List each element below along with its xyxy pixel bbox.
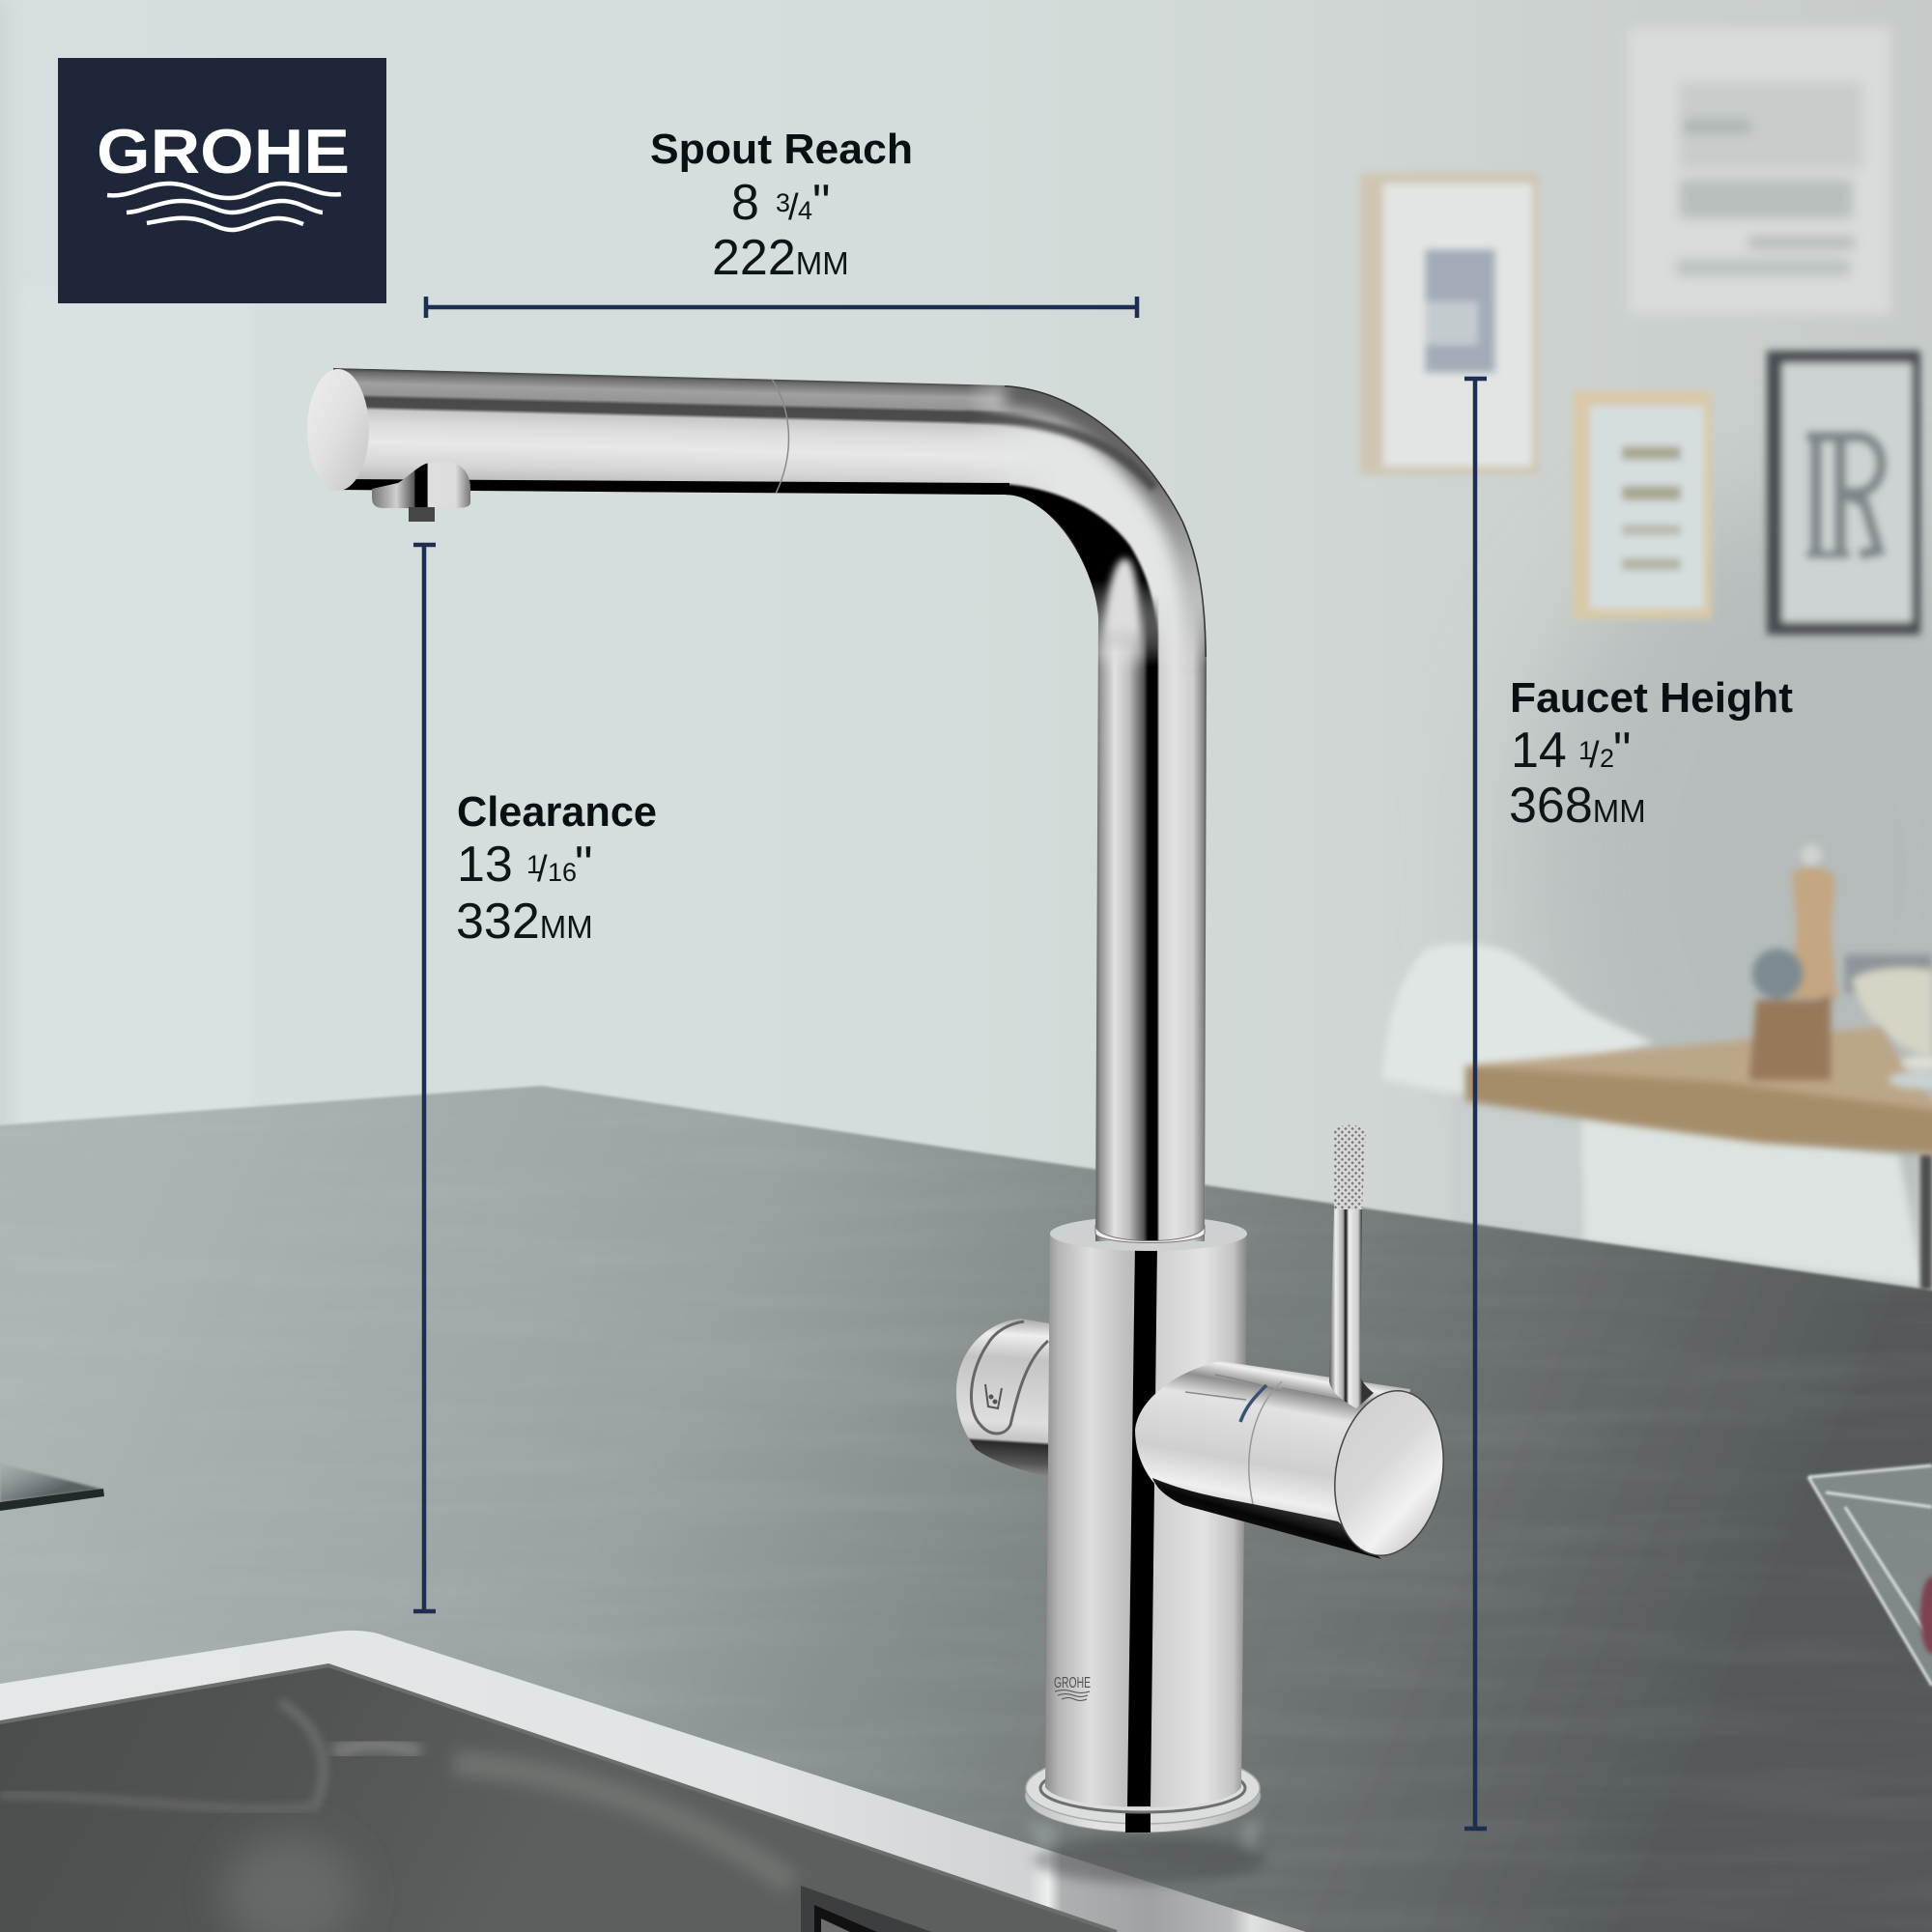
spout reach millimetres: MM: [796, 245, 849, 281]
lever knurled tip: [1334, 1125, 1366, 1209]
logo waves: [107, 184, 341, 230]
faucet: [290, 357, 1456, 1884]
faucet height heading: Faucet Height: [1510, 674, 1793, 722]
logo panel: [58, 58, 386, 303]
faucet height inches: 14: [1511, 723, 1567, 779]
clearance inches: 1: [526, 850, 541, 879]
base ring: [1025, 1752, 1261, 1833]
frame: white print, top right: [1629, 28, 1890, 314]
frame: black: [1767, 351, 1920, 635]
sink rim: [0, 1631, 1306, 1932]
spout: [333, 368, 1207, 1241]
blurred picture frames: [1360, 28, 1920, 635]
sink: [0, 1631, 1306, 1932]
blue temperature mark: [1240, 1385, 1266, 1422]
glass bowl: [1808, 1465, 1932, 1686]
sink drain: [801, 1886, 932, 1932]
faucet column: [1045, 1216, 1247, 1807]
spout reach dimension line: [426, 297, 1137, 318]
spout reach heading: Spout Reach: [650, 126, 913, 173]
handle underside shadow: [1152, 1478, 1381, 1559]
nozzle: [409, 507, 435, 522]
handle seam: [1249, 1381, 1282, 1504]
table leg: [1920, 1154, 1932, 1290]
lever shaft: [1329, 1125, 1374, 1408]
rim inner lip: [0, 1665, 1117, 1932]
clearance inches: ": [575, 837, 592, 893]
hob corner: [0, 1463, 104, 1511]
faucet height inches: /: [1589, 735, 1600, 776]
table top: [1465, 1027, 1932, 1154]
spout end face: [307, 369, 369, 491]
faucet height inches: 1: [1578, 736, 1593, 765]
spout reach inches: 4: [798, 196, 812, 225]
faucet height millimetres: 368: [1509, 778, 1593, 834]
blurred table with objects: [1465, 844, 1932, 1290]
countertop: [0, 1082, 1932, 1932]
clearance heading: Clearance: [457, 788, 657, 836]
column black reflection: [1127, 1241, 1157, 1806]
spout reach inches: 8: [731, 175, 759, 231]
salt mill: [1749, 949, 1831, 1080]
icon: water glass: [985, 1384, 1002, 1408]
clearance millimetres: MM: [540, 909, 593, 945]
spout horizontal tube: [333, 368, 1048, 495]
faucet height measurement: [1464, 379, 1793, 1829]
button outline: [971, 1321, 1048, 1434]
faucet reflection on counter: [1026, 1816, 1265, 1884]
frame: wooden, small: [1573, 391, 1712, 619]
spout vertical tube: [1095, 597, 1207, 1241]
clearance millimetres: 332: [456, 894, 540, 950]
pepper mill tall: [1789, 844, 1837, 1000]
stacked dishes: [1889, 1056, 1932, 1089]
spout black inner reflection: [1005, 484, 1158, 657]
right mixing handle: [1135, 1125, 1456, 1564]
frame: wooden, tall: [1360, 173, 1539, 474]
faucet height millimetres: MM: [1593, 793, 1646, 829]
spout reach measurement: [426, 126, 1137, 318]
clearance inches: /: [537, 849, 548, 890]
spout reach inches: /: [788, 187, 799, 228]
spout collar: [1095, 1225, 1205, 1242]
column logo: [1054, 1675, 1091, 1700]
aerator: [372, 461, 470, 522]
handle end cap: [1322, 1382, 1456, 1564]
spout reach millimetres: 222: [712, 230, 796, 286]
faucet height dimension line: [1464, 379, 1487, 1829]
spout reach inches: ": [812, 175, 830, 231]
clearance inches: 16: [548, 858, 577, 887]
spout bottom black strip: [338, 479, 1009, 497]
logo wordmark: GROHE: [97, 116, 350, 186]
faucet height inches: ": [1613, 723, 1631, 779]
handle body: [1135, 1361, 1410, 1557]
clearance dimension line: [413, 545, 436, 1611]
pull-out seam: [770, 376, 788, 494]
spout reach inches: 3: [776, 188, 790, 217]
clearance inches: 13: [457, 837, 513, 893]
left button knob: [956, 1319, 1049, 1478]
clearance measurement: [413, 545, 657, 1611]
sink basin: [0, 1662, 1121, 1932]
faucet height inches: 2: [1600, 744, 1614, 773]
blurred chair: [1382, 944, 1922, 1285]
white bowl: [1845, 954, 1932, 1057]
handle reflections: [1185, 1375, 1362, 1404]
spout bend shading: [966, 385, 1207, 667]
column logo: GROHE: [1054, 1675, 1091, 1691]
spout inner highlight: [1103, 558, 1142, 671]
